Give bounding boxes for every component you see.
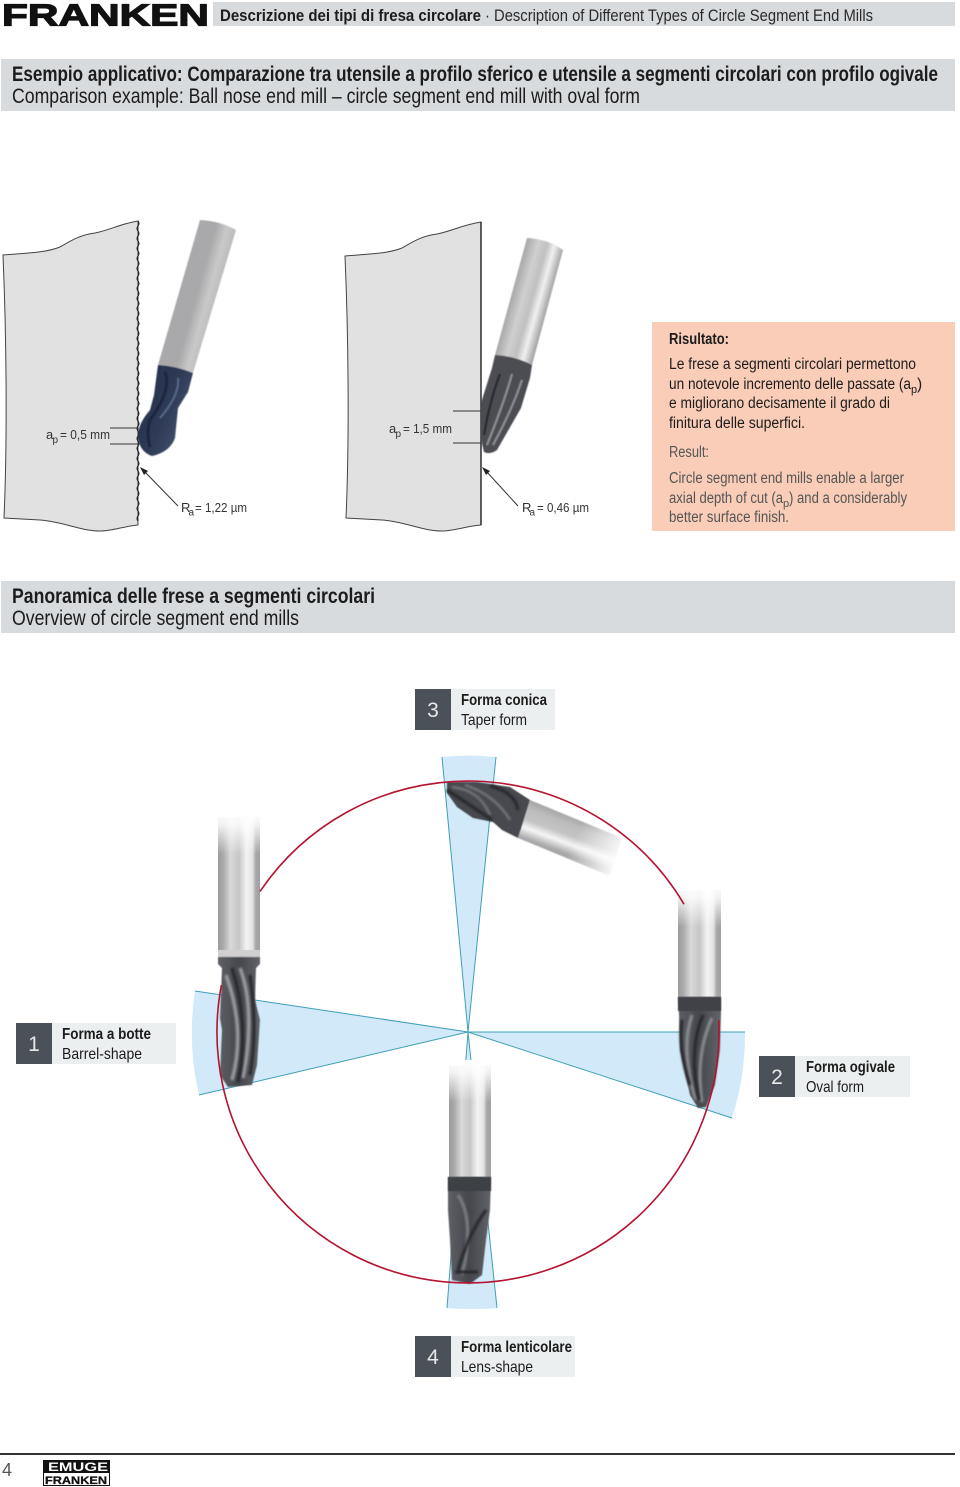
label 3: taper form: Taper form: [461, 712, 527, 729]
dimension: Ra 1,22 µm: R: [181, 500, 190, 515]
label 4: lens-shape: Forma lenticolare: [461, 1339, 572, 1356]
dimension: Ra 0,46 µm: a: [530, 508, 536, 518]
label 1: barrel-shape: 1: [28, 1033, 40, 1056]
label 2: oval form: Oval form: [806, 1079, 864, 1096]
red circle: [217, 781, 719, 1283]
tool: ball nose shank: [138, 220, 236, 456]
tool 3: taper form: [447, 782, 640, 885]
dimension: Ra 1,22 µm: a: [188, 508, 194, 518]
footer logo: [43, 1460, 110, 1487]
tool 1: barrel-shape: [217, 812, 261, 1087]
dimension: Ra 0,46 µm: R: [522, 500, 531, 515]
tool: oval form cutter: [481, 355, 532, 453]
tool: oval form shank: [481, 238, 563, 453]
dimension: Ra 1,22 µm: = 1,22 µm: [195, 500, 247, 515]
panel: result callout: finitura delle superfici.: [669, 415, 805, 432]
header bar: [213, 2, 955, 26]
diagram: circle with angle wedges and tools: [192, 756, 745, 1309]
label 2: oval form: Forma ogivale: [806, 1059, 895, 1076]
dimension: ap 1,5 mm: p: [396, 429, 402, 440]
label 4: lens-shape: Lens-shape: [461, 1359, 533, 1376]
dimension: ap 1,5 mm: = 1,5 mm: [403, 421, 452, 436]
section heading: overview: Panoramica delle frese a segmenti circolari: [12, 585, 375, 608]
label 3: taper form: Forma conica: [461, 692, 547, 709]
dimension: Ra 1,22 µm: [140, 467, 247, 518]
label 1: barrel-shape: Barrel-shape: [62, 1046, 142, 1063]
wedge 2: [468, 1032, 745, 1118]
tool 2: oval form: [677, 885, 722, 1108]
dimension: Ra 0,46 µm: = 0,46 µm: [537, 500, 589, 515]
label 4: lens-shape: 4: [427, 1346, 439, 1369]
panel: result callout: un notevole incremento delle passate (a: [669, 376, 911, 393]
label 2: oval form: [759, 1056, 910, 1097]
label 3: taper form: [415, 689, 555, 730]
panel: result callout: ): [917, 376, 922, 393]
header bar: Descrizione dei tipi di fresa circolare: [220, 6, 481, 25]
rough surface edge: [137, 221, 139, 521]
dimension: ap 0,5 mm: a: [46, 427, 54, 442]
dimension: ap 0,5 mm: = 0,5 mm: [60, 427, 110, 442]
smooth surface edge: [480, 222, 482, 525]
dimension: ap 1,5 mm: [389, 411, 481, 443]
footer logo: EMUGE: [48, 1460, 108, 1474]
wedge 3: [442, 756, 496, 1032]
page number: 4: [2, 1460, 12, 1480]
panel: result callout: p: [783, 498, 789, 510]
panel: result callout: better surface finish.: [669, 509, 789, 526]
panel: result callout: Le frese a segmenti circolari permettono: [669, 356, 916, 373]
wedge 4: [447, 1032, 497, 1309]
label 4: lens-shape: [415, 1336, 575, 1377]
panel: result callout: Risultato:: [669, 331, 729, 348]
diagram: circle segment end mill on workpiece: [345, 222, 589, 531]
label 2: oval form: 2: [771, 1066, 783, 1089]
panel: result callout: p: [911, 384, 917, 396]
dimension: ap 0,5 mm: [46, 427, 138, 446]
footer logo: FRANKEN: [45, 1475, 107, 1487]
label 1: barrel-shape: [16, 1023, 176, 1064]
tool: ball nose cutter: [138, 365, 193, 456]
section heading: overview: Overview of circle segment end mills: [12, 607, 299, 630]
label 1: barrel-shape: Forma a botte: [62, 1026, 151, 1043]
panel: result callout: e migliorano decisamente il grado di: [669, 395, 890, 412]
panel: result callout: ) and a considerably: [789, 490, 907, 507]
dimension: ap 0,5 mm: p: [52, 435, 58, 446]
section heading: overview: [1, 581, 955, 633]
tool 4: lens-shape: [448, 1060, 492, 1284]
section heading: comparison example: [1, 59, 955, 111]
panel: result callout: axial depth of cut (a: [669, 490, 783, 507]
dimension: Ra 0,46 µm: [482, 467, 589, 518]
wedge 1: [192, 991, 468, 1095]
section heading: comparison example: Comparison example: Ball nose end mill – circle segment end mill with oval form: [12, 85, 640, 108]
workpiece with rough surface: [3, 221, 138, 531]
workpiece with smooth surface: [345, 222, 481, 531]
panel: result callout: [652, 322, 955, 531]
label 3: taper form: 3: [427, 699, 439, 722]
dimension: ap 1,5 mm: a: [389, 421, 397, 436]
diagram: ball nose end mill on workpiece: [3, 220, 247, 531]
header bar: · Description of Different Types of Circle Segment End Mills: [485, 6, 873, 25]
panel: result callout: Circle segment end mills enable a larger: [669, 470, 904, 487]
panel: result callout: Result:: [669, 444, 709, 461]
footer: [0, 1453, 955, 1487]
